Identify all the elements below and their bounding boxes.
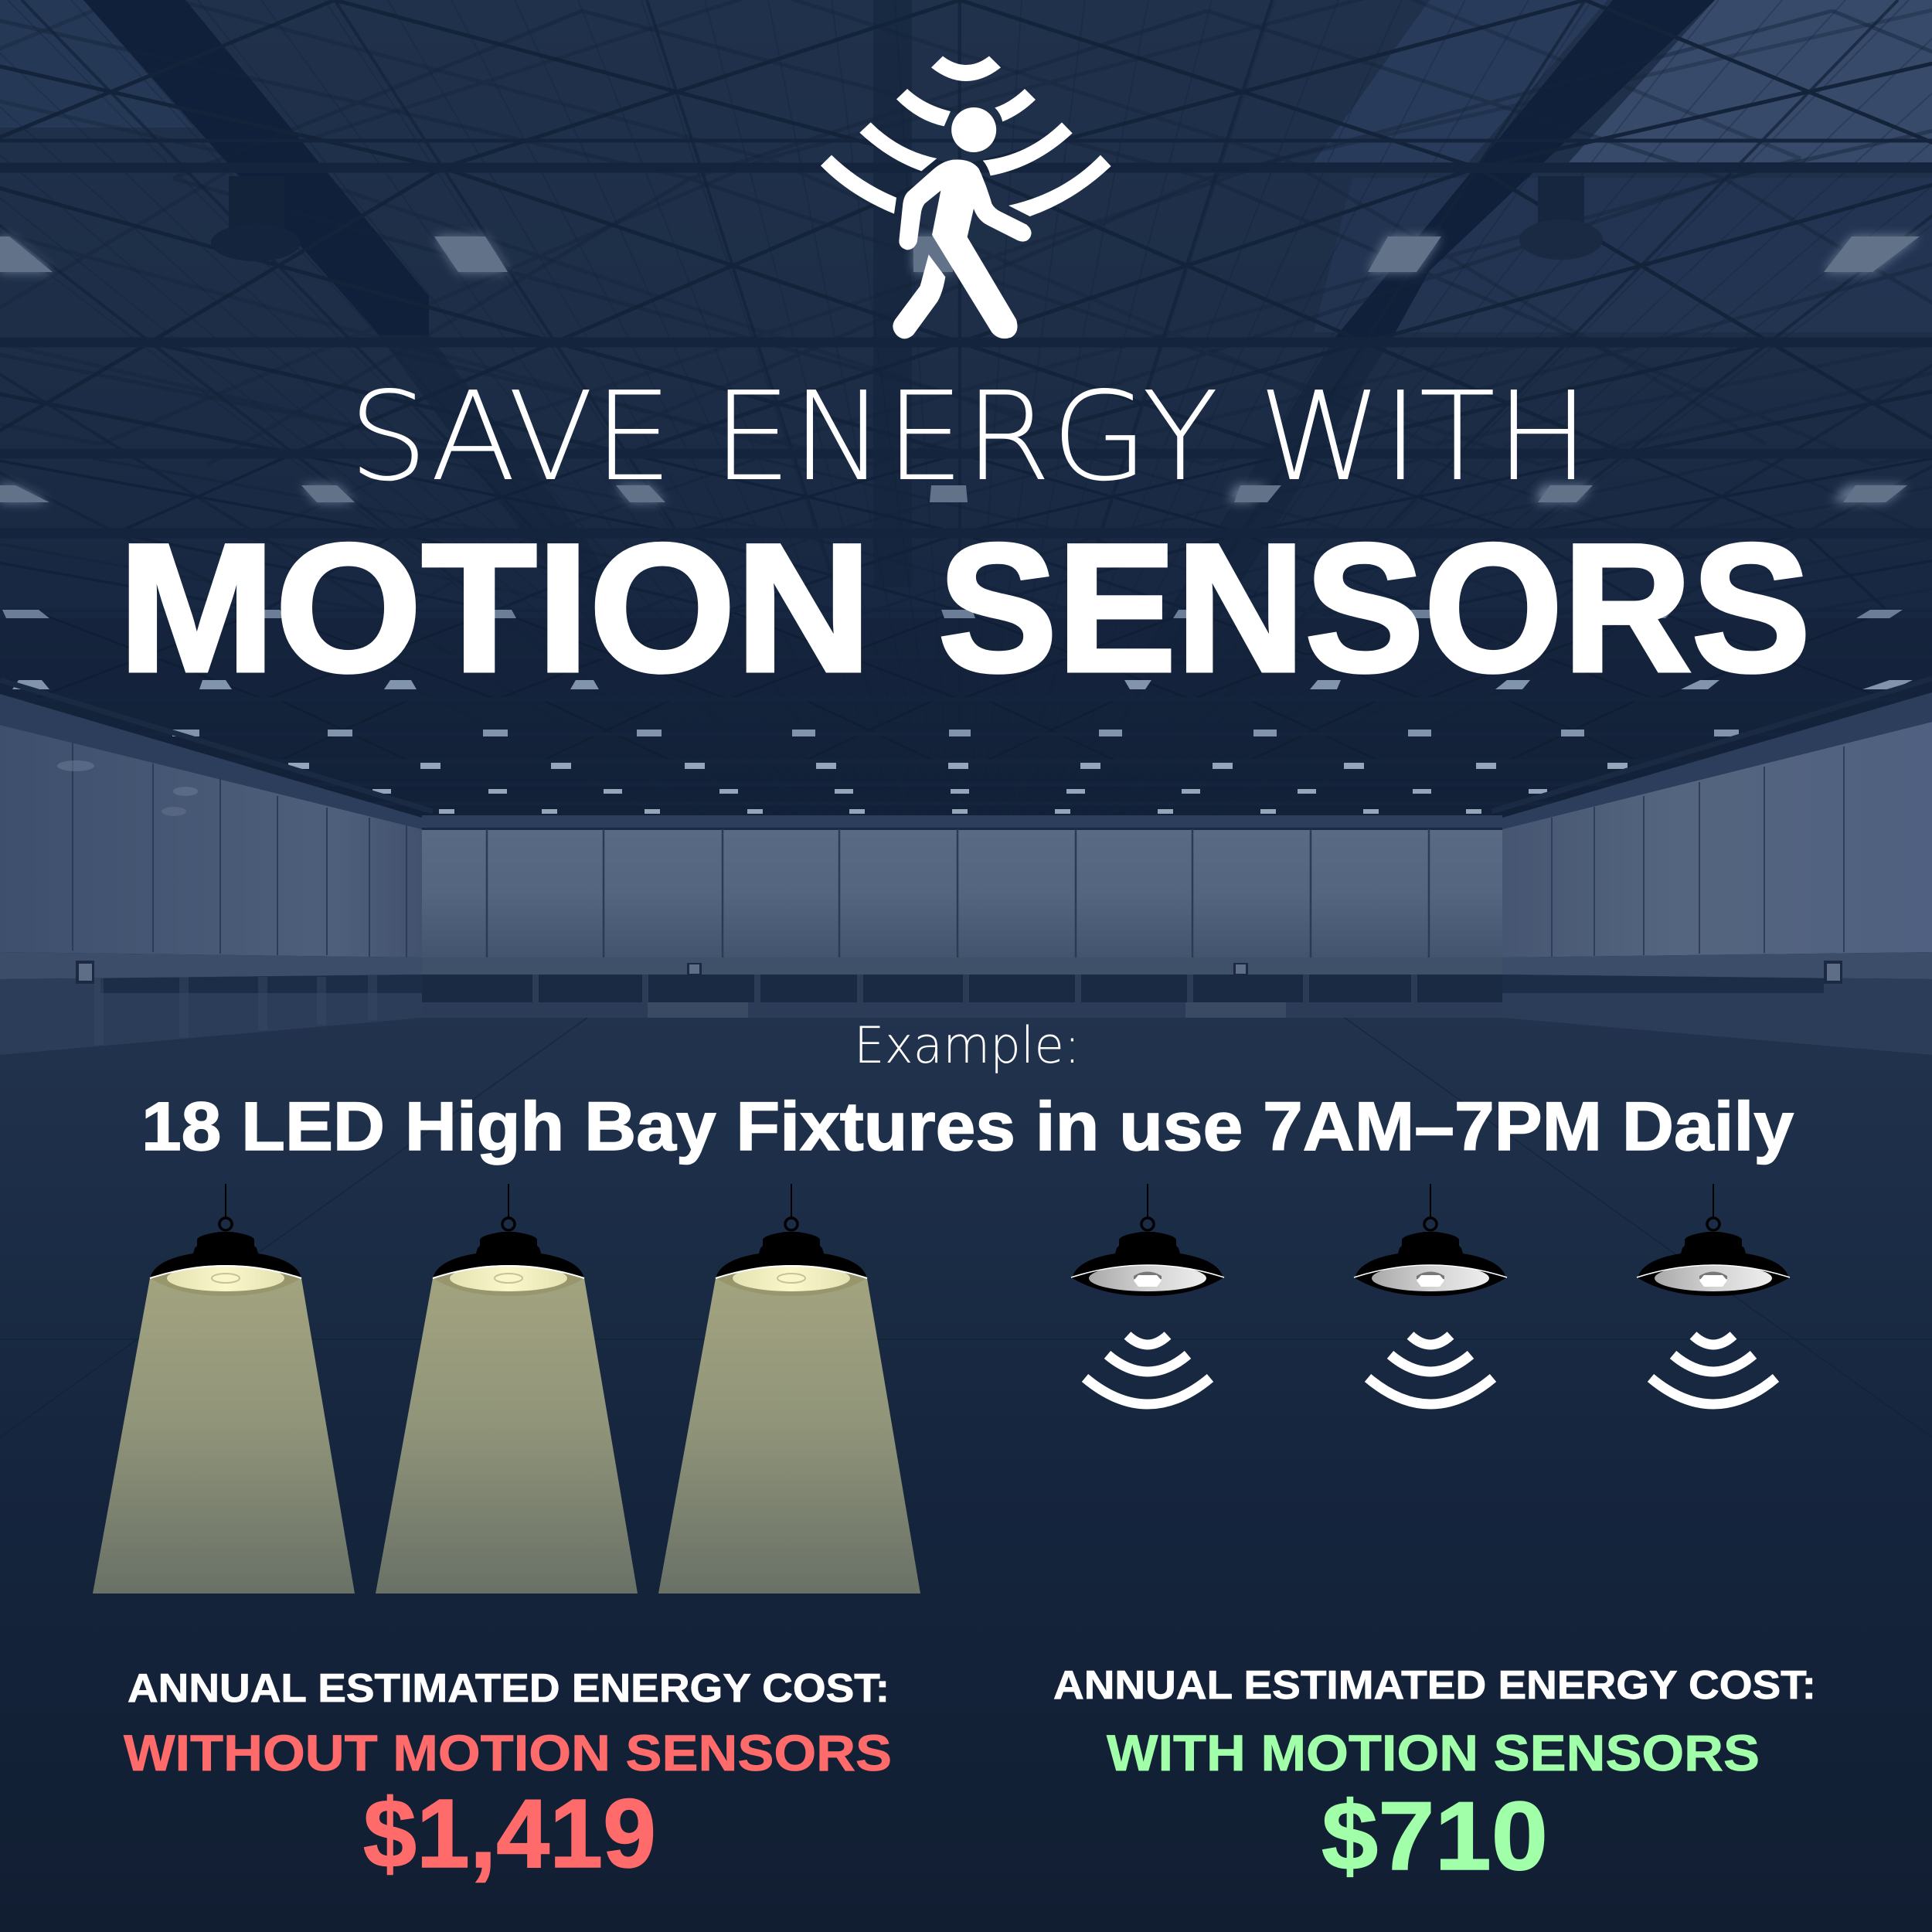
title line 1: SAVE ENERGY WITH — [349, 366, 1590, 509]
amount: $710 — [1321, 1781, 1548, 1890]
heading: WITHOUT MOTION SENSORS — [124, 1724, 892, 1781]
example label: Example: — [854, 1017, 1080, 1075]
floor — [0, 1018, 1932, 1932]
title line 2: MOTION — [118, 506, 872, 710]
amount: $1,419 — [363, 1779, 656, 1888]
icon: motion waves — [821, 56, 1111, 216]
back wall — [422, 815, 1502, 1018]
icon: walking person with motion waves — [821, 56, 1111, 338]
lit lamps: without sensors — [93, 1184, 920, 1594]
roof ducts — [83, 0, 429, 335]
lamp 6 — [1637, 1184, 1790, 1404]
left wall — [0, 680, 433, 1055]
right wall — [1492, 679, 1932, 1055]
lamp 3 — [658, 1184, 920, 1594]
sensor lamps: with sensors — [1071, 1184, 1790, 1404]
cost block: with motion sensors — [1053, 1663, 1816, 1890]
cost label: ANNUAL ESTIMATED ENERGY COST: — [1053, 1663, 1816, 1708]
example description: 18 LED High Bay Fixtures in use 7AM–7PM Daily — [141, 1087, 1794, 1165]
lamp 4 — [1071, 1184, 1224, 1404]
icon: person figure — [893, 107, 1032, 338]
heading: WITH MOTION SENSORS — [1107, 1724, 1760, 1781]
title line 2: SENSORS — [938, 506, 1811, 710]
lamp 2 — [376, 1184, 638, 1594]
title line 2 — [118, 506, 1811, 710]
ceiling — [0, 0, 1932, 971]
lamp 1 — [93, 1184, 355, 1594]
cost block: without motion sensors — [124, 1666, 892, 1888]
cost label: ANNUAL ESTIMATED ENERGY COST: — [128, 1666, 889, 1711]
roof vents — [211, 176, 1603, 261]
lamp 5 — [1354, 1184, 1507, 1404]
ceiling lights — [0, 236, 1920, 814]
truss lines — [0, 0, 1932, 971]
